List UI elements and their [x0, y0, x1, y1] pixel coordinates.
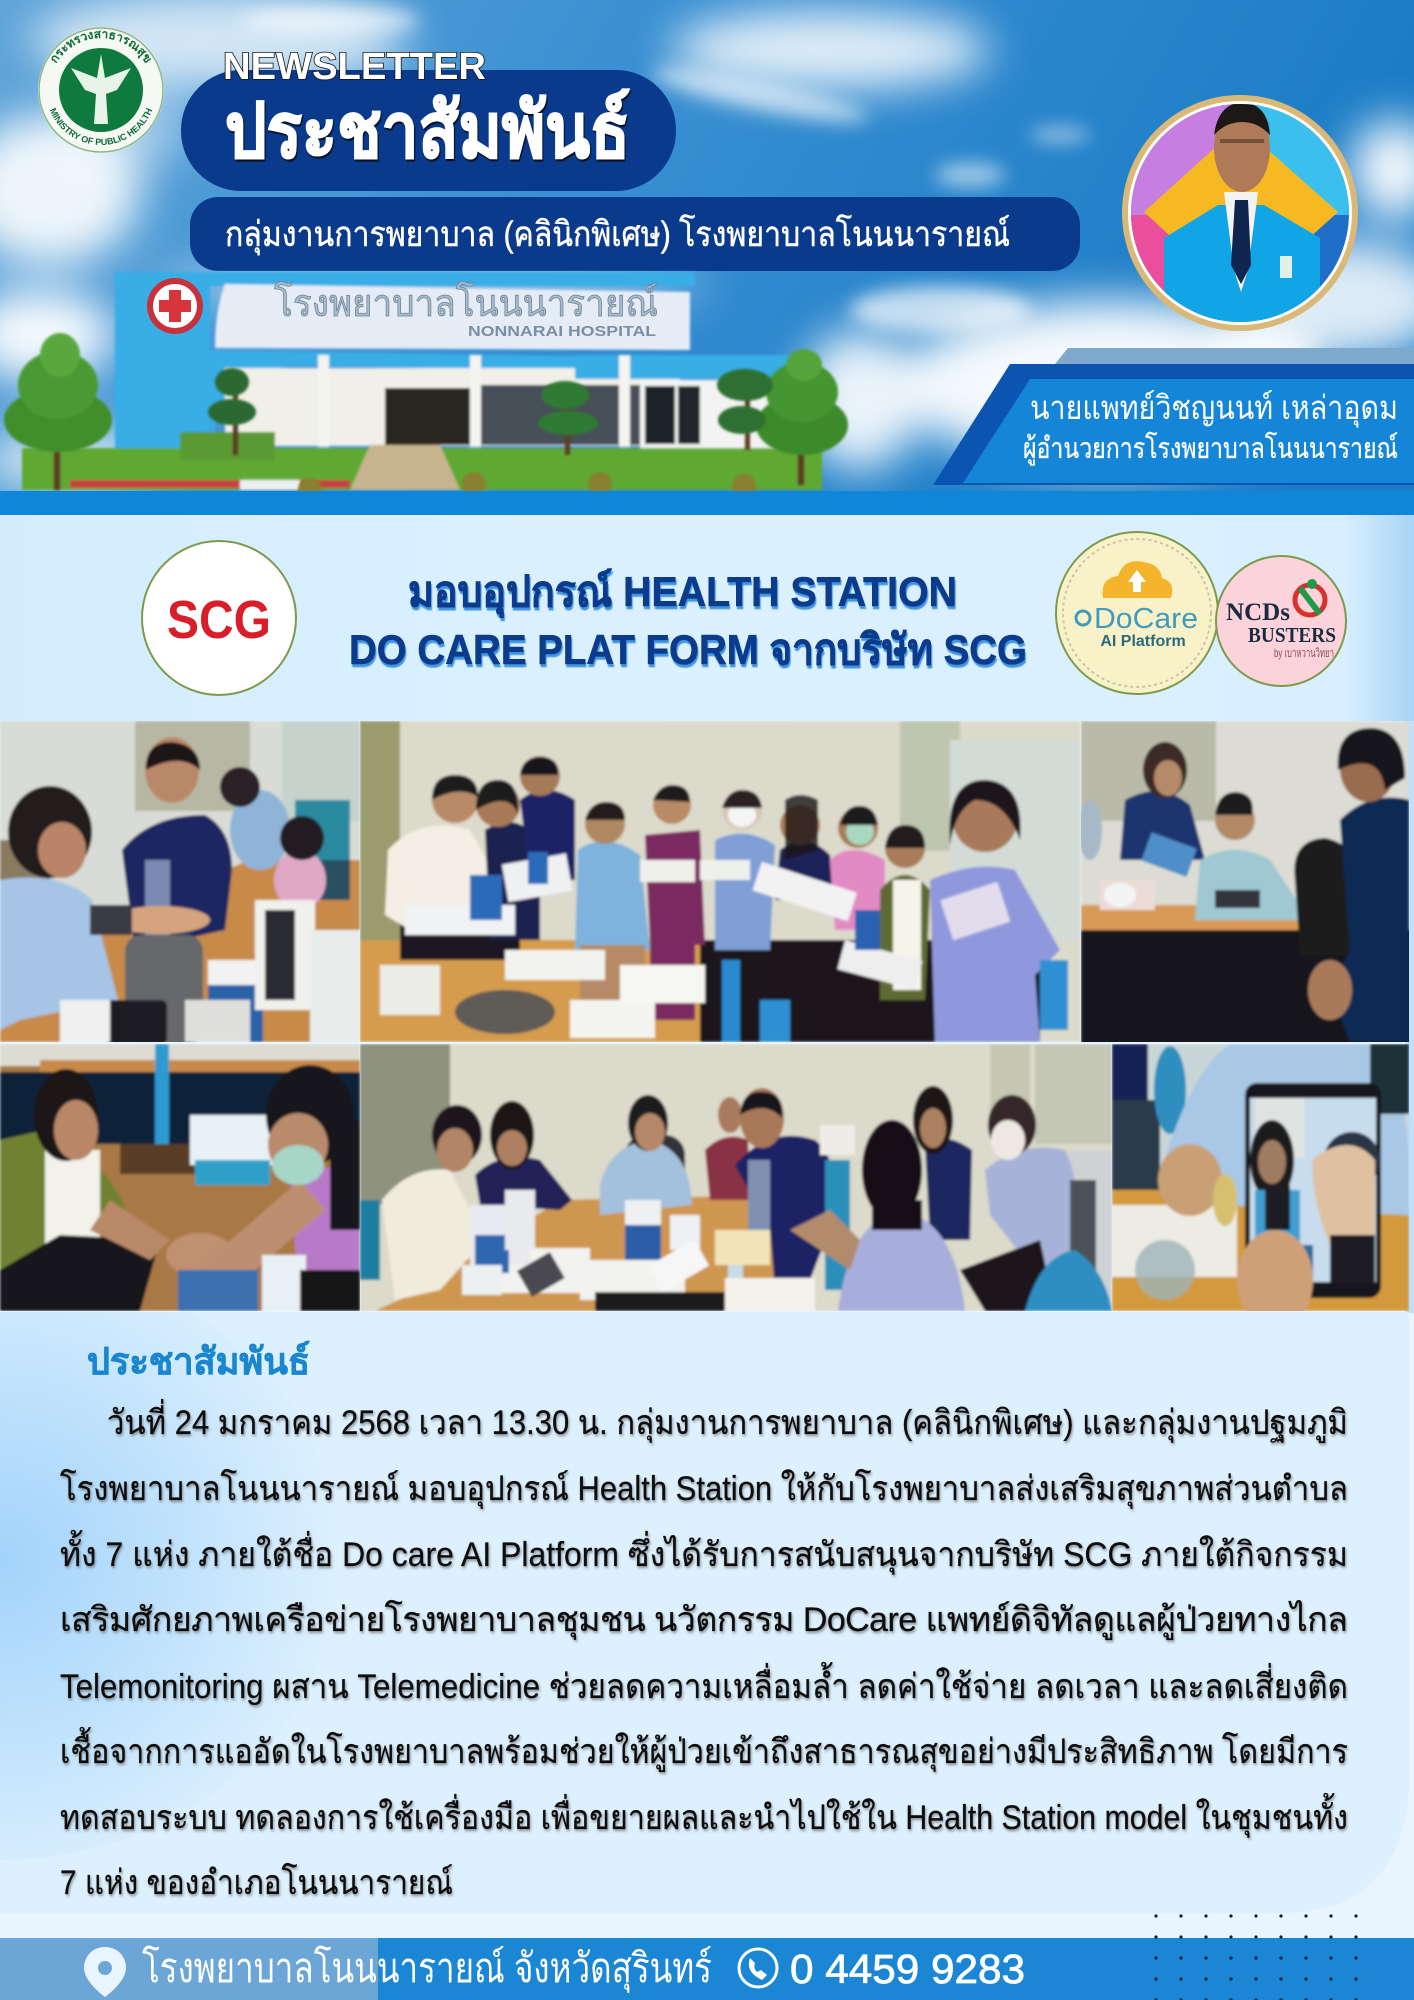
middle section background [0, 515, 1414, 721]
footer bar [0, 1938, 1414, 2000]
icon: location pin [84, 1947, 126, 1997]
logo: NCDs Busters: by เบาหวานวิทยา [1274, 646, 1334, 660]
logo: NCDs Busters: BUSTERS [1248, 623, 1336, 647]
sign: english name: NONNARAI HOSPITAL [468, 323, 656, 340]
pill: department name: กลุ่มงานการพยาบาล (คลินิกพิเศษ) โรงพยาบาลโนนนารายณ์ [225, 214, 1010, 255]
photo: blood sugar test [0, 1044, 360, 1311]
photo: nurse and patient at table [1078, 721, 1414, 1045]
pill: newsletter title background [181, 70, 676, 191]
body panel background [0, 1260, 1414, 1913]
heading: event title: มอบอุปกรณ์ HEALTH STATION [408, 568, 957, 618]
logo: Ministry of Public Health [38, 27, 164, 153]
photo: group holding health station kits [360, 721, 1081, 1042]
decorative dot grid [1150, 1912, 1362, 2000]
pill: department name [190, 197, 1080, 271]
body text: เสริมศักยภาพเครือข่ายโรงพยาบาลชุมชน นวัตกรรม DoCare แพทย์ดิจิทัลดูแลผู้ป่วยทางไกล [60, 1600, 1348, 1640]
logo: DoCare AI Platform: AI Platform [1100, 633, 1186, 650]
header sky background [0, 0, 1414, 492]
footer: hospital location: โรงพยาบาลโนนนารายณ์ จังหวัดสุรินทร์ [142, 1945, 712, 1993]
logo: Ministry of Public Health: กระทรวงสาธารณสุข [52, 30, 152, 64]
photo: video call on tablet [1112, 1044, 1409, 1330]
footer: phone number: 0 4459 9283 [790, 1946, 1025, 1992]
photo gutter strip [1405, 721, 1414, 1313]
heading: event title: DO CARE PLAT FORM จากบริษัท SCG [349, 626, 1027, 673]
logo: Ministry of Public Health: MINISTRY OF PUBLIC HEALTH [50, 108, 152, 145]
label: NEWSLETTER: NEWSLETTER [223, 46, 486, 88]
logo: NCDs Busters: NCDs [1226, 599, 1290, 626]
body text: 7 แห่ง ของอำเภอโนนนารายณ์ [60, 1863, 453, 1902]
logo: NCDs Busters [1216, 556, 1346, 686]
body text: ทั้ง 7 แห่ง ภายใต้ชื่อ Do care AI Platform ซึ่งได้รับการสนับสนุนจากบริษัท SCG ภายใต้กิจกรรม [60, 1530, 1348, 1575]
icon: phone [739, 1949, 777, 1987]
photo: team testing devices around table [360, 1044, 1112, 1311]
heading: ประชาสัมพันธ์: ประชาสัมพันธ์ [225, 89, 630, 174]
logo: DoCare AI Platform [1056, 532, 1218, 694]
sign: hospital name: โรงพยาบาลโนนนารายณ์ [274, 281, 658, 325]
section heading: ประชาสัมพันธ์ [87, 1341, 310, 1382]
body text [60, 1399, 1348, 1902]
logo: DoCare AI Platform: DoCare [1094, 603, 1198, 635]
blue divider band [0, 491, 1414, 515]
director name panel [933, 348, 1414, 485]
logo: SCG: SCG [167, 590, 271, 650]
portrait of hospital director [1122, 95, 1362, 331]
photo: blood pressure check with man [0, 721, 360, 1045]
trees and topiary [4, 333, 848, 502]
heading: event title [349, 568, 1027, 673]
sign: red cross [147, 278, 203, 334]
logo: SCG [142, 541, 296, 695]
hospital building photo [4, 272, 848, 502]
